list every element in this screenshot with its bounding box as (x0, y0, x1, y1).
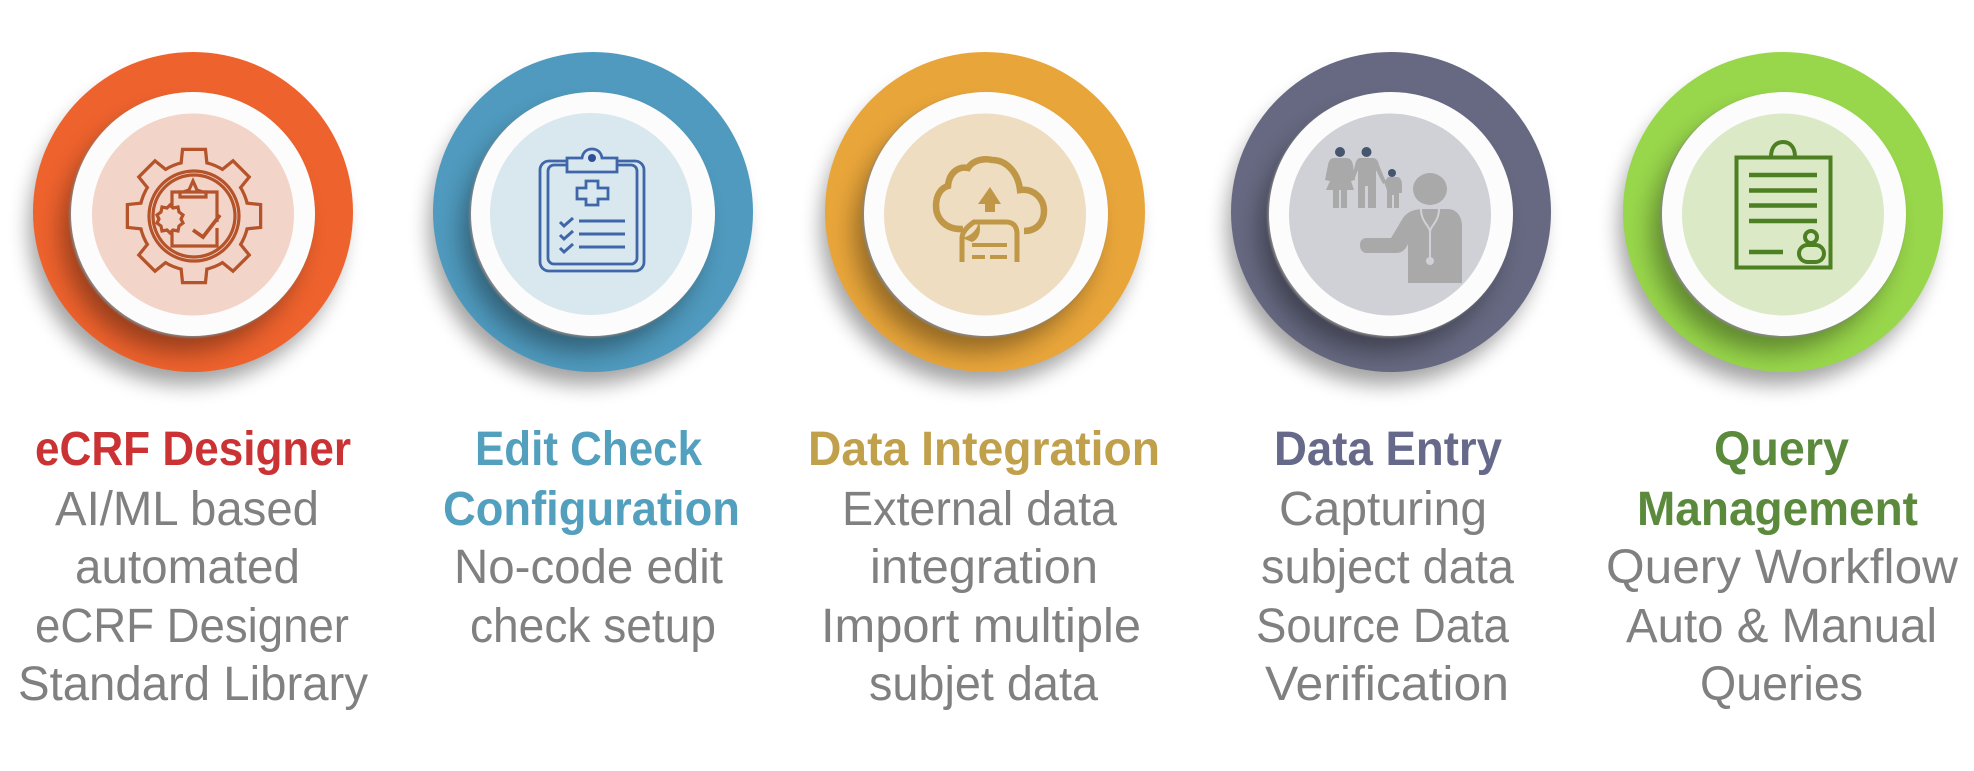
white disc (1269, 92, 1513, 336)
description: Standard Library (18, 657, 369, 711)
outer ring green (1623, 52, 1943, 372)
white disc (71, 92, 315, 336)
outer ring slate (1231, 52, 1551, 372)
heading: Data Entry (1274, 422, 1502, 476)
description: AI/ML based (55, 482, 319, 536)
description: Import multiple (821, 599, 1141, 653)
heading (1637, 422, 1918, 536)
icon: form with person (1736, 142, 1830, 268)
panel: Data Entry badge (1227, 52, 1551, 385)
text column: Edit Check Configuration (443, 422, 740, 653)
heading: Edit Check (475, 422, 703, 476)
pale inner disc (1682, 114, 1884, 316)
heading: Data Integration (808, 422, 1160, 476)
description: subjet data (869, 657, 1098, 711)
description: Queries (1700, 657, 1863, 711)
outer ring blue (433, 52, 753, 372)
description (1606, 540, 1959, 711)
description: Auto & Manual (1626, 599, 1937, 653)
outer ring orange (33, 52, 353, 372)
description (1256, 482, 1514, 711)
text column: eCRF Designer (18, 422, 369, 711)
description: External data (842, 482, 1117, 536)
heading: Management (1637, 482, 1918, 536)
pale inner disc (1289, 114, 1491, 316)
pale inner disc (884, 114, 1086, 316)
description: automated (75, 540, 300, 594)
text column: Query Management (1606, 422, 1959, 711)
white disc (1662, 92, 1906, 336)
description: Query Workflow (1606, 540, 1959, 594)
pale inner disc (490, 113, 692, 315)
description: check setup (470, 599, 716, 653)
white disc (864, 92, 1108, 336)
heading: Query (1714, 422, 1849, 476)
pale inner disc (92, 114, 294, 316)
text column: Data Entry (1256, 422, 1514, 711)
description (18, 482, 369, 711)
heading: eCRF Designer (35, 422, 351, 476)
description: eCRF Designer (35, 599, 349, 653)
outer ring amber (825, 52, 1145, 372)
description (454, 540, 724, 653)
description: Verification (1265, 657, 1509, 711)
icon: medical clipboard (540, 149, 644, 271)
icon: doctor and family (1325, 147, 1462, 283)
panel: eCRF Designer badge (29, 52, 353, 385)
icon: gear with clipboard (129, 151, 259, 281)
description: Capturing (1279, 482, 1487, 536)
panel: Data Integration badge (821, 52, 1145, 385)
white disc (471, 92, 715, 336)
icon: cloud upload document (936, 159, 1044, 262)
description: Source Data (1256, 599, 1509, 653)
description: integration (870, 540, 1098, 594)
description (821, 482, 1141, 711)
panel: Query Management badge (1619, 52, 1943, 385)
description: subject data (1261, 540, 1514, 594)
heading (443, 422, 740, 536)
heading: Configuration (443, 482, 740, 536)
text column: Data Integration (808, 422, 1160, 711)
description: No-code edit (454, 540, 724, 594)
panel: Edit Check Configuration badge (429, 52, 753, 385)
